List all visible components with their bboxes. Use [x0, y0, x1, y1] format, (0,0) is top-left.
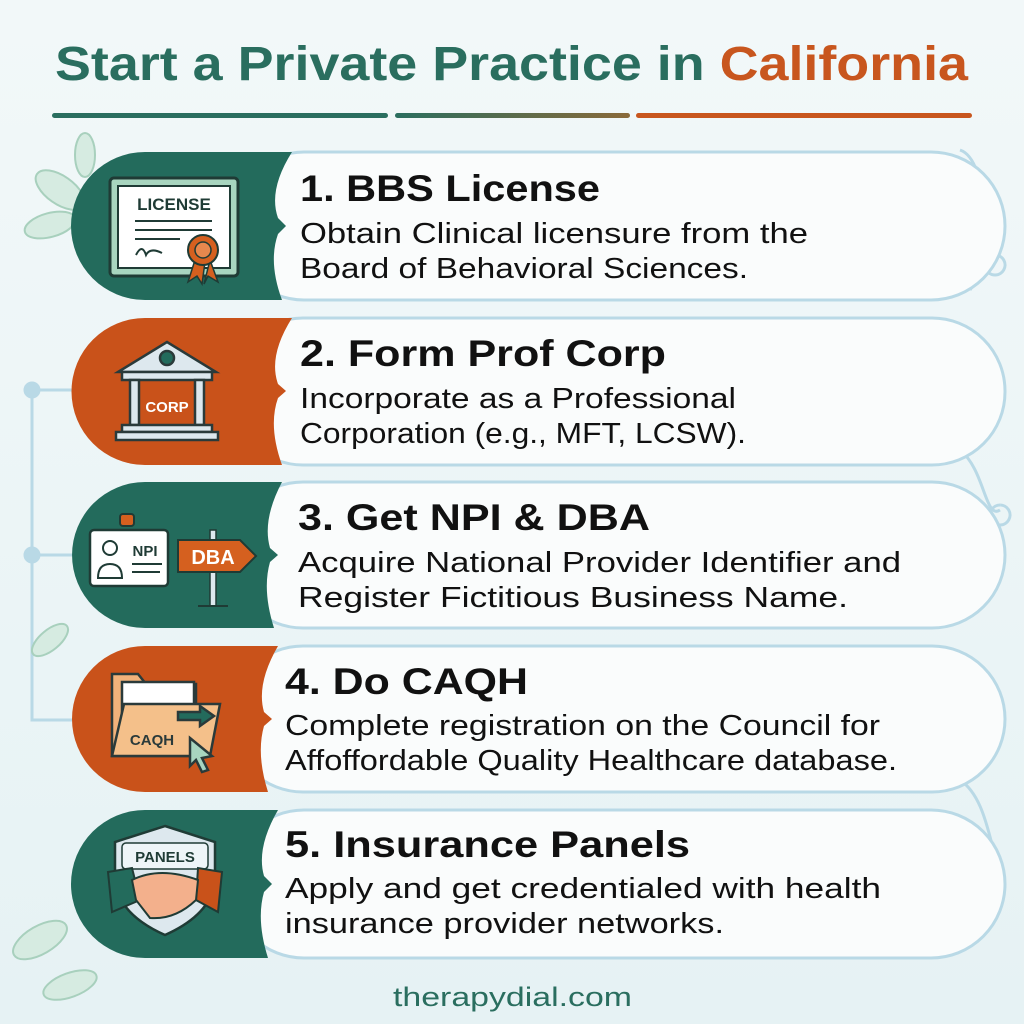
- card 4: CAQH: [130, 732, 174, 749]
- icon: NPI badge and DBA sign: NPI: [132, 543, 158, 560]
- card 5: insurance provider networks.: [285, 908, 724, 940]
- card 1: Board of Behavioral Sciences.: [300, 253, 748, 285]
- heading 4: 4. Do CAQH: [285, 661, 528, 702]
- description 2: Incorporate as a Professional: [300, 383, 736, 415]
- card 5: [71, 810, 1005, 958]
- footer: therapydial.com: [393, 982, 632, 1012]
- icon: panels shield handshake: [108, 826, 222, 935]
- heading 1: 1. BBS License: [300, 168, 600, 209]
- icon: NPI badge and DBA sign: DBA: [191, 547, 235, 569]
- card 3: [72, 482, 1005, 628]
- card 2: Corporation (e.g., MFT, LCSW).: [300, 418, 746, 450]
- icon: panels shield handshake: PANELS: [135, 849, 195, 866]
- leaves decoration: [7, 133, 100, 1006]
- icon: CAQH folder: [112, 674, 220, 772]
- title: Start a Private Practice in California: [55, 38, 968, 91]
- heading 5: 5. Insurance Panels: [285, 824, 690, 865]
- heading 3: 3. Get NPI & DBA: [298, 497, 650, 538]
- description 5: Apply and get credentialed with health: [285, 873, 881, 905]
- description 1: Obtain Clinical licensure from the: [300, 218, 808, 250]
- card 3: Register Fictitious Business Name.: [298, 582, 848, 614]
- icon: NPI badge and DBA sign: [90, 514, 256, 606]
- card 2: CORP: [145, 399, 189, 416]
- card 2: [71, 318, 1005, 465]
- description 4: Complete registration on the Council for: [285, 710, 880, 742]
- decorative connector lines: [25, 150, 1010, 860]
- icon: building CORP: [116, 342, 218, 440]
- icon: license certificate: [110, 178, 238, 284]
- heading 2: 2. Form Prof Corp: [300, 333, 666, 374]
- card 4: Affoffordable Quality Healthcare database.: [285, 745, 897, 777]
- description 3: Acquire National Provider Identifier and: [298, 547, 901, 579]
- card 4: [72, 646, 1005, 792]
- icon: license certificate: LICENSE: [137, 195, 211, 214]
- card 1: [71, 152, 1005, 300]
- title underline: [52, 113, 972, 118]
